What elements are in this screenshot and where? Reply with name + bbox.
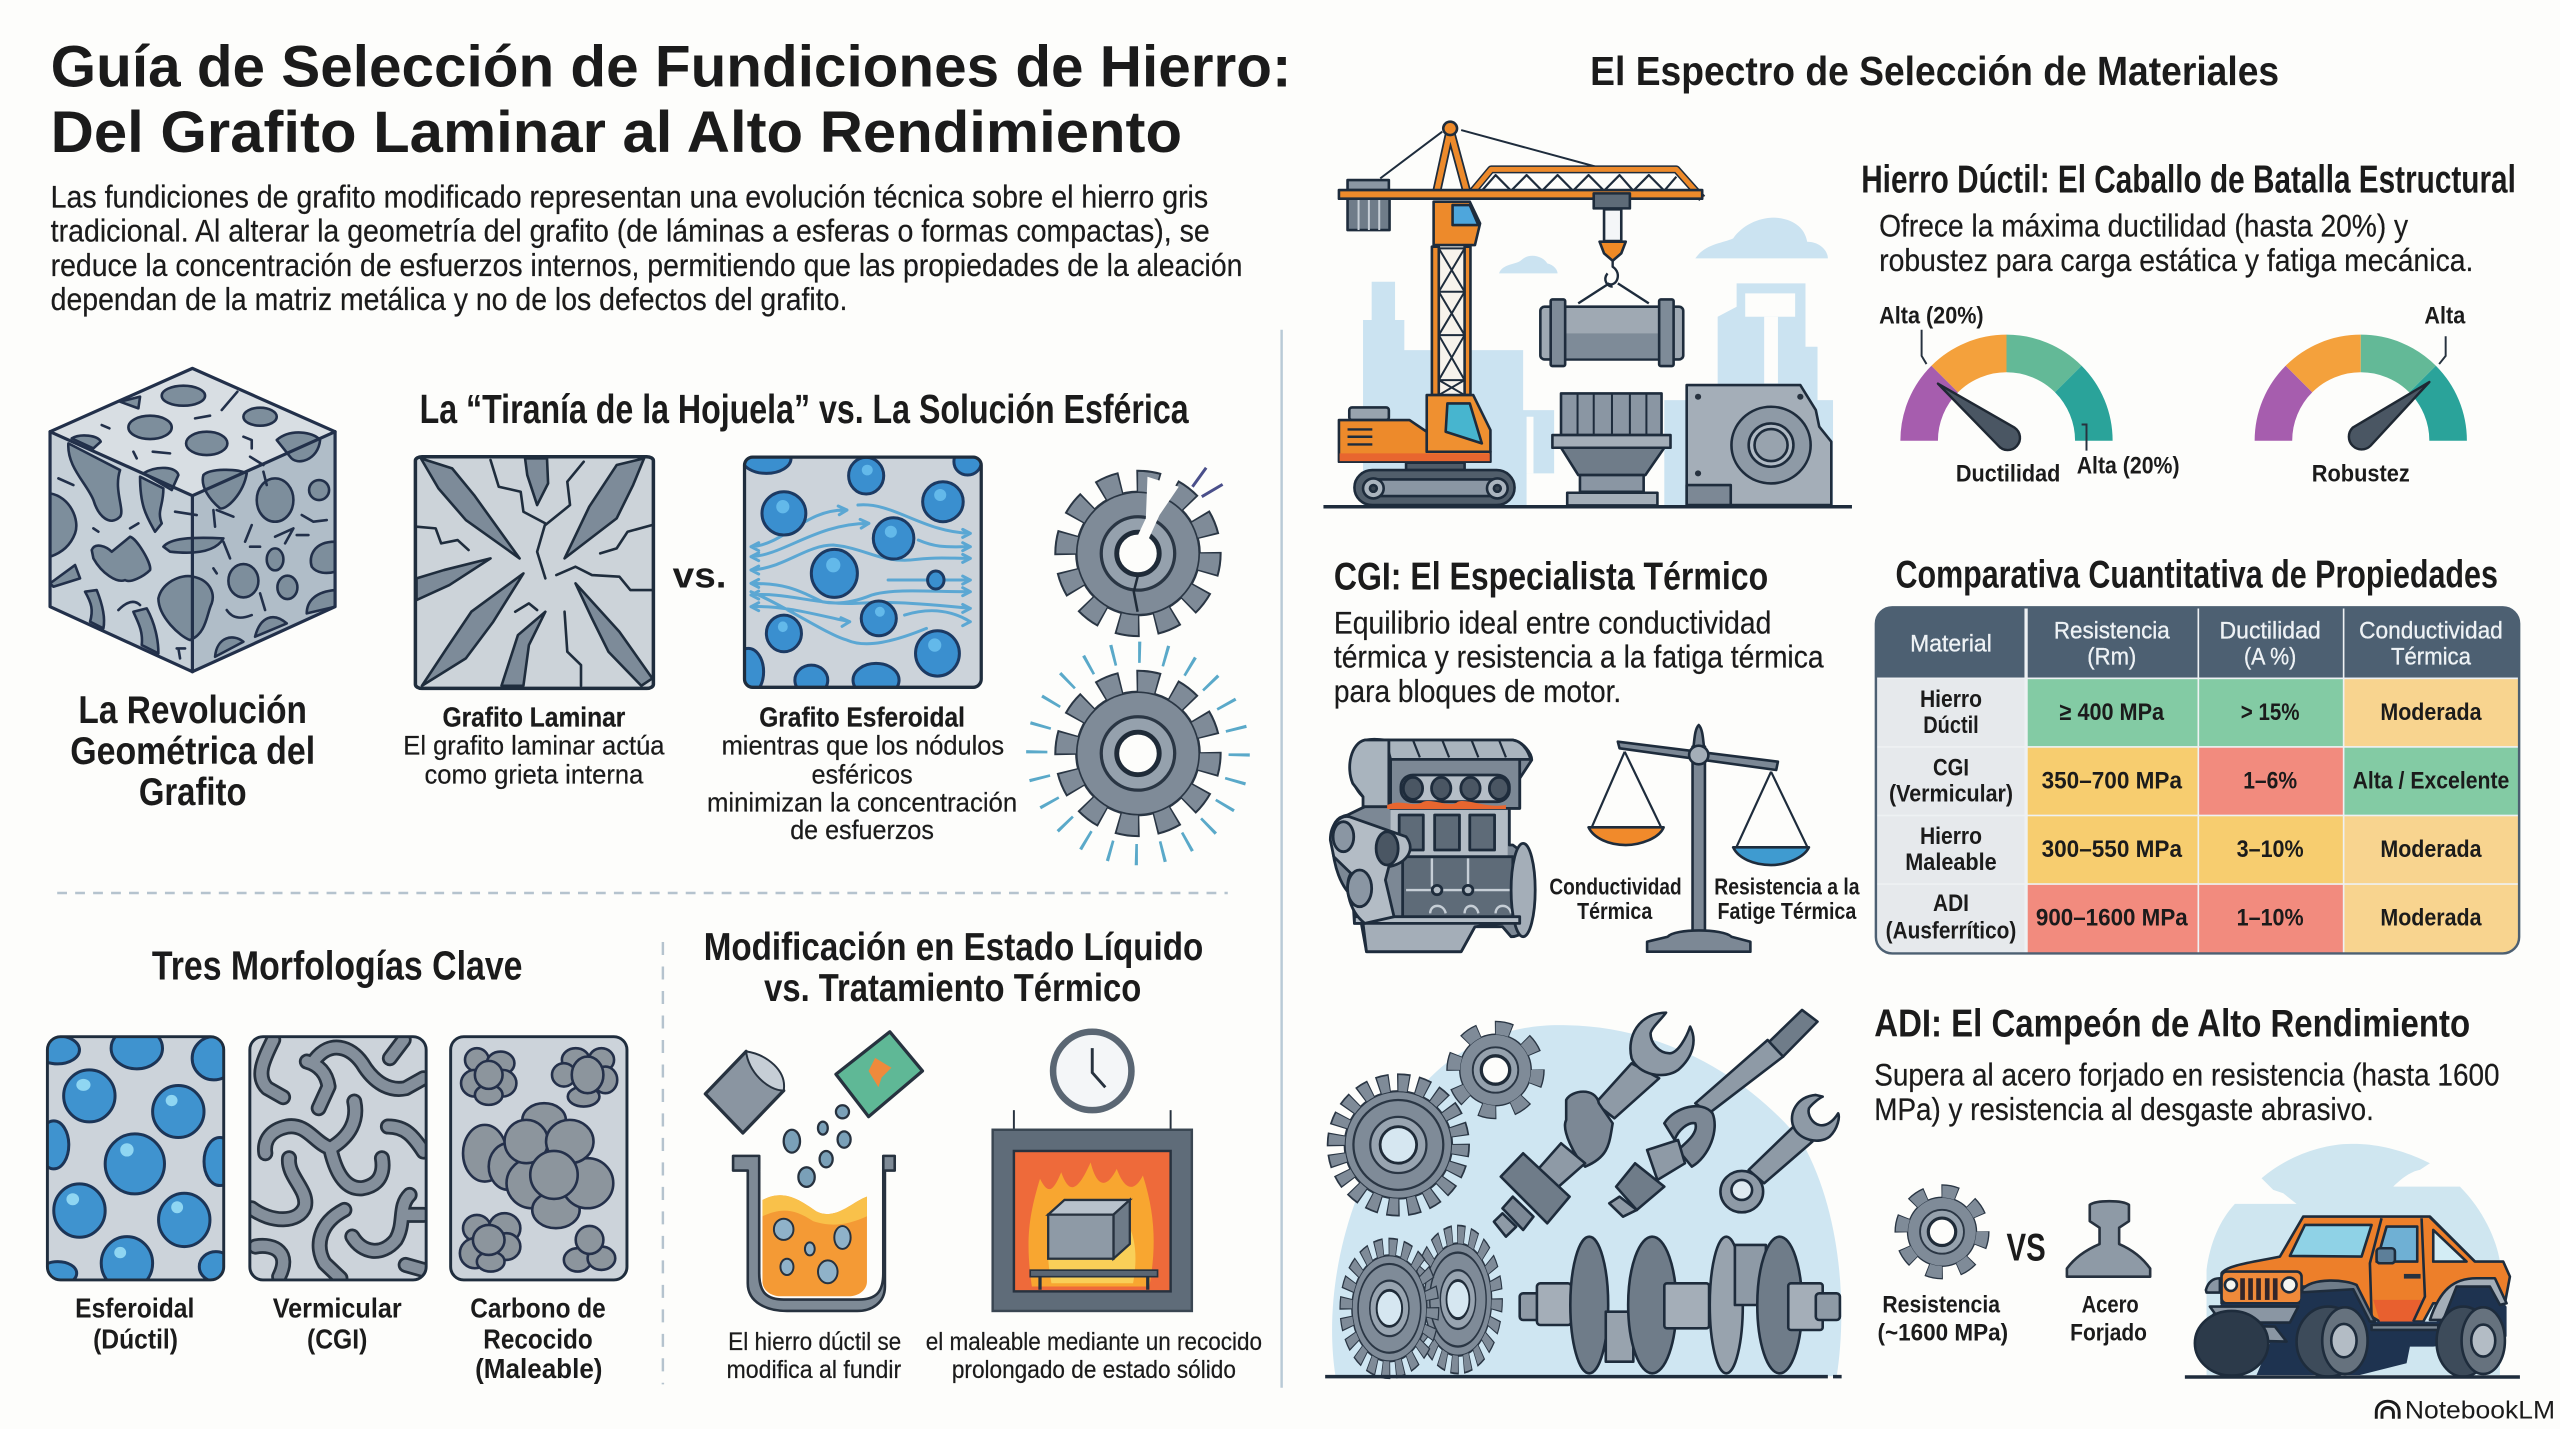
main vertical divider bbox=[1281, 330, 1283, 1388]
illustration: ADI parts bbox=[1325, 1010, 1842, 1377]
heading: revolucion geometrica: La Revolución bbox=[78, 689, 307, 732]
table: property comparison: Maleable bbox=[1905, 849, 1997, 876]
table: property comparison: Moderada bbox=[2380, 699, 2482, 726]
table: property comparison: Resistencia bbox=[2054, 617, 2170, 644]
scale labels: Fatige Térmica bbox=[1718, 898, 1857, 924]
captions: processes: El hierro dúctil se bbox=[728, 1328, 901, 1356]
panel: laminar graphite bbox=[415, 457, 653, 688]
morphology labels: (CGI) bbox=[307, 1324, 367, 1355]
intro paragraph: dependan de la matriz metálica y no de los defectos del grafito. bbox=[51, 281, 847, 317]
heading: modificacion: vs. Tratamiento Térmico bbox=[764, 967, 1141, 1010]
text: hierro ductil: robustez para carga estática y fatiga mecánica. bbox=[1879, 243, 2473, 278]
text: adi bbox=[1874, 1058, 2500, 1127]
table: property comparison: Alta / Excelente bbox=[2353, 768, 2509, 795]
caption: spheroidal: Grafito Esferoidal bbox=[759, 701, 965, 732]
table: property comparison: 1–6% bbox=[2243, 768, 2297, 795]
heading: espectro: El Espectro de Selección de Materiales bbox=[1590, 48, 2279, 94]
heading: tirania de la hojuela: La “Tiranía de la Hojuela” vs. La Solución Esférica bbox=[420, 386, 1189, 432]
morphology labels: (Dúctil) bbox=[93, 1324, 178, 1355]
morphology labels: Carbono de bbox=[470, 1292, 606, 1323]
morphology labels: Esferoidal bbox=[75, 1292, 194, 1323]
caption: spheroidal: minimizan la concentración bbox=[707, 787, 1017, 817]
caption: spheroidal bbox=[707, 701, 1017, 845]
table: property comparison: Material bbox=[1910, 630, 1992, 657]
icon: balance scale bbox=[1589, 725, 1809, 952]
heading: revolucion geometrica: Grafito bbox=[139, 771, 247, 814]
illustration: crane lifting cast parts bbox=[1323, 122, 1852, 507]
table: property comparison: 3–10% bbox=[2237, 836, 2304, 863]
gauge: ductilidad: Alta (20%) bbox=[2077, 452, 2180, 479]
title: Guía de Selección de Fundiciones de Hierro: bbox=[51, 35, 1291, 100]
icon: broken gear bbox=[1066, 468, 1223, 625]
table: property comparison: Hierro bbox=[1920, 686, 1982, 713]
table: property comparison: Dúctil bbox=[1923, 712, 1979, 739]
table: property comparison: 1–10% bbox=[2237, 905, 2304, 932]
caption: spheroidal: esféricos bbox=[811, 760, 913, 790]
text: adi: MPa) y resistencia al desgaste abrasivo. bbox=[1874, 1092, 2374, 1127]
text: adi: Supera al acero forjado en resistencia (hasta 1600 bbox=[1874, 1058, 2500, 1093]
morphology labels: Recocido bbox=[483, 1324, 593, 1355]
labels: strength vs steel: Resistencia bbox=[1882, 1292, 2000, 1319]
illustration: orange off-road truck bbox=[2185, 1144, 2520, 1377]
caption: spheroidal: de esfuerzos bbox=[790, 815, 934, 845]
table: property comparison: Ductilidad bbox=[2220, 617, 2321, 644]
table: property comparison: Térmica bbox=[2391, 643, 2471, 670]
caption: laminar: como grieta interna bbox=[425, 760, 643, 790]
heading: revolucion geometrica bbox=[70, 689, 315, 814]
captions: processes: prolongado de estado sólido bbox=[952, 1356, 1236, 1384]
gauge: ductilidad: Ductilidad bbox=[1956, 461, 2060, 488]
panel: spheroidal graphite bbox=[742, 456, 983, 689]
heading: revolucion geometrica: Geométrica del bbox=[70, 730, 315, 773]
vertical dashed divider bbox=[662, 942, 664, 1384]
text: cgi: para bloques de motor. bbox=[1334, 674, 1621, 709]
panel: vermicular morphology bbox=[250, 1037, 426, 1280]
icon: ladle with additives bbox=[705, 1032, 922, 1311]
table: property comparison: Conductividad bbox=[2359, 617, 2503, 644]
scale labels: Térmica bbox=[1577, 898, 1652, 924]
intro paragraph: Las fundiciones de grafito modificado representan una evolución técnica sobre el hierro gris bbox=[51, 178, 1208, 214]
intro paragraph: tradicional. Al alterar la geometría del grafito (de láminas a esferas o formas compactas), se bbox=[51, 213, 1210, 249]
icon: ADI gear vs forged steel: VS bbox=[2006, 1226, 2046, 1269]
panel: temper carbon morphology bbox=[451, 1037, 627, 1280]
icon: gear with radiating lines bbox=[1037, 652, 1239, 855]
intro paragraph bbox=[51, 178, 1242, 317]
table: property comparison: Moderada bbox=[2380, 905, 2482, 932]
table: property comparison: 300–550 MPa bbox=[2042, 836, 2182, 863]
panel: spheroidal morphology bbox=[46, 1035, 226, 1282]
NotebookLM logo: NotebookLM bbox=[2405, 1397, 2555, 1425]
labels: strength vs steel: (~1600 MPa) bbox=[1878, 1319, 2008, 1346]
table: property comparison: > 15% bbox=[2241, 699, 2300, 726]
gauge: robustez bbox=[2255, 302, 2467, 488]
title: Del Grafito Laminar al Alto Rendimiento bbox=[51, 100, 1182, 165]
table: property comparison: 350–700 MPa bbox=[2042, 768, 2182, 795]
labels: strength vs steel: Acero bbox=[2082, 1292, 2139, 1319]
heading: modificacion: Modificación en Estado Líquido bbox=[704, 926, 1203, 969]
text: cgi: térmica y resistencia a la fatiga térmica bbox=[1334, 640, 1824, 675]
icon: ADI gear vs forged steel bbox=[1902, 1192, 2150, 1277]
morphology labels bbox=[75, 1292, 606, 1384]
gauge: robustez: Robustez bbox=[2312, 461, 2410, 488]
icon: furnace bbox=[993, 1110, 1192, 1311]
scale labels: Conductividad bbox=[1549, 874, 1682, 900]
intro paragraph: reduce la concentración de esfuerzos internos, permitiendo que las propiedades de la aleación bbox=[51, 247, 1242, 283]
heading: cgi: CGI: El Especialista Térmico bbox=[1334, 555, 1768, 598]
caption: laminar: El grafito laminar actúa bbox=[403, 730, 665, 760]
table: property comparison: (Ausferrítico) bbox=[1886, 918, 2016, 945]
labels: strength vs steel bbox=[1878, 1292, 2147, 1346]
caption: spheroidal: mientras que los nódulos bbox=[722, 730, 1004, 760]
table: property comparison bbox=[1876, 607, 2519, 953]
gauge: robustez: Alta bbox=[2424, 302, 2466, 329]
icon: engine block bbox=[1330, 739, 1535, 952]
captions: processes: modifica al fundir bbox=[727, 1356, 901, 1384]
table: property comparison: (A %) bbox=[2244, 643, 2296, 670]
captions: processes bbox=[727, 1328, 1262, 1384]
heading: modificacion bbox=[704, 926, 1203, 1010]
scale labels: Resistencia a la bbox=[1714, 874, 1860, 900]
table: property comparison: 900–1600 MPa bbox=[2036, 905, 2188, 932]
scale labels bbox=[1549, 874, 1860, 924]
table: property comparison: ≥ 400 MPa bbox=[2060, 699, 2164, 726]
icon: graphite cube bbox=[50, 368, 335, 672]
table: property comparison: Moderada bbox=[2380, 836, 2482, 863]
gauge: ductilidad: Alta (20%) bbox=[1879, 302, 1984, 329]
heading: tres morfologias: Tres Morfologías Clave bbox=[152, 943, 522, 989]
text: hierro ductil bbox=[1879, 209, 2473, 278]
icon: clock bbox=[1053, 1032, 1131, 1110]
table: property comparison: Hierro bbox=[1920, 823, 1982, 850]
caption: laminar bbox=[403, 701, 665, 790]
labels: strength vs steel: Forjado bbox=[2070, 1319, 2147, 1346]
table: property comparison: (Rm) bbox=[2087, 643, 2136, 670]
captions: processes: el maleable mediante un recocido bbox=[926, 1328, 1262, 1356]
text: hierro ductil: Ofrece la máxima ductilidad (hasta 20%) y bbox=[1879, 209, 2409, 244]
morphology labels: Vermicular bbox=[273, 1292, 402, 1323]
morphology labels: (Maleable) bbox=[475, 1353, 602, 1384]
title bbox=[51, 35, 1291, 165]
horizontal dashed divider bbox=[57, 892, 1228, 894]
gauge: ductilidad bbox=[1879, 302, 2180, 488]
table: property comparison: ADI bbox=[1933, 890, 1969, 917]
text: cgi: Equilibrio ideal entre conductividad bbox=[1334, 605, 1771, 640]
text: cgi bbox=[1334, 605, 1824, 709]
table: property comparison: (Vermicular) bbox=[1889, 781, 2013, 808]
caption: laminar: Grafito Laminar bbox=[442, 701, 626, 732]
vs label: vs. bbox=[673, 555, 727, 596]
table: property comparison: CGI bbox=[1933, 754, 1969, 781]
